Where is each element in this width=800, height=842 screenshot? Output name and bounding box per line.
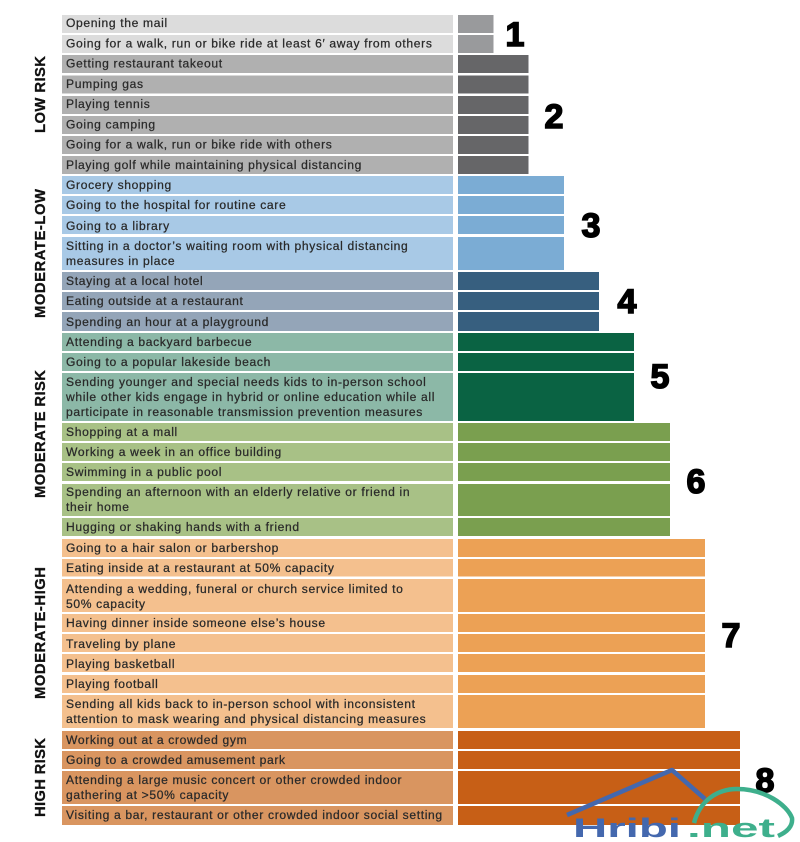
activity labels, level 3: Sitting in a doctor’s waiting room with physical distancing [66, 239, 408, 253]
level 5 band [62, 333, 669, 421]
activity labels, level 7 [66, 541, 426, 726]
number 2: 2 [545, 98, 563, 136]
activity labels, level 1 [66, 16, 433, 50]
number 8: 8 [756, 762, 774, 800]
number 6: 6 [687, 463, 705, 501]
activity labels, level 7: 50% capacity [66, 597, 146, 611]
activity rows, level 1 [62, 15, 453, 53]
activity labels, level 7: Going to a hair salon or barbershop [66, 541, 279, 555]
level 8 band [62, 731, 774, 825]
label: moderate risk: MODERATE RISK [33, 370, 49, 498]
activity rows, level 5 [62, 333, 453, 421]
logo roof line [567, 770, 705, 815]
logo green arc [694, 789, 792, 836]
activity labels, level 7: Traveling by plane [66, 637, 176, 651]
activity labels, level 2: Getting restaurant takeout [66, 56, 223, 70]
activity labels, level 8: Going to a crowded amusement park [66, 753, 286, 767]
activity labels, level 5 [65, 335, 435, 419]
number 1: 1 [506, 16, 524, 54]
level 7 band [62, 539, 740, 728]
activity rows, level 4 [62, 272, 453, 331]
watermark logo [567, 770, 792, 842]
activity labels, level 2 [66, 56, 362, 172]
activity labels, level 4: Spending an hour at a playground [66, 315, 269, 329]
activity labels, level 8: Working out at a crowded gym [66, 733, 247, 747]
number 4: 4 [618, 283, 637, 321]
activity labels, level 2: Playing tennis [66, 97, 150, 111]
number 3: 3 [582, 207, 600, 245]
number 5: 5 [651, 358, 669, 396]
level 6 band [62, 423, 705, 536]
score bars, level 6 [458, 423, 670, 536]
score bars, level 1 [458, 15, 494, 53]
activity labels, level 3: Grocery shopping [66, 178, 172, 192]
activity labels, level 3 [66, 178, 408, 268]
activity rows, level 8 [62, 731, 453, 825]
activity rows, level 6 [62, 423, 453, 536]
label: moderate-high: MODERATE-HIGH [33, 567, 49, 699]
level 2 band [62, 55, 563, 174]
activity labels, level 6 [66, 425, 410, 534]
label: low risk: LOW RISK [33, 56, 49, 133]
score bars, level 8 [458, 731, 740, 825]
activity labels, level 5: Sending younger and special needs kids to in-person school [66, 375, 426, 389]
activity labels, level 2: Going for a walk, run or bike ride with others [66, 138, 333, 152]
level 4 band [62, 272, 637, 331]
activity labels, level 6: Working a week in an office building [66, 445, 282, 459]
activity labels, level 1: Opening the mail [66, 16, 168, 30]
activity labels, level 6: Shopping at a mall [66, 425, 178, 439]
activity labels, level 7: Eating inside at a restaurant at 50% capacity [66, 561, 335, 575]
activity labels, level 5: while other kids engage in hybrid or online education while all [65, 390, 435, 404]
activity labels, level 8: Attending a large music concert or other crowded indoor [66, 773, 402, 787]
activity labels, level 2: Pumping gas [66, 77, 144, 91]
activity labels, level 8: gathering at >50% capacity [66, 788, 229, 802]
activity labels, level 6: Swimming in a public pool [66, 465, 222, 479]
activity labels, level 8 [66, 733, 443, 822]
activity labels, level 5: Going to a popular lakeside beach [66, 355, 271, 369]
activity labels, level 6: their home [66, 500, 130, 514]
activity labels, level 5: Attending a backyard barbecue [66, 335, 252, 349]
activity labels, level 7: Having dinner inside someone else’s house [66, 616, 326, 630]
activity labels, level 3: Going to a library [66, 219, 170, 233]
risk category labels [33, 56, 49, 817]
activity labels, level 1: Going for a walk, run or bike ride at least 6′ away from others [66, 36, 433, 50]
score bars, level 2 [458, 55, 528, 174]
activity labels, level 5: participate in reasonable transmission prevention measures [66, 405, 423, 419]
number 7: 7 [722, 617, 740, 655]
activity labels, level 7: Sending all kids back to in-person school with inconsistent [66, 697, 416, 711]
activity labels, level 2: Going camping [66, 118, 156, 132]
activity labels, level 4: Staying at a local hotel [66, 274, 203, 288]
label: moderate-low: MODERATE-LOW [33, 189, 49, 318]
activity rows, level 2 [62, 55, 453, 174]
activity labels, level 8: Visiting a bar, restaurant or other crowded indoor social setting [66, 808, 443, 822]
activity labels, level 7: Attending a wedding, funeral or church service limited to [66, 582, 404, 596]
label: high risk: HIGH RISK [33, 738, 49, 817]
level 3 band [62, 176, 600, 270]
score bars, level 3 [458, 176, 564, 270]
score bars, level 7 [458, 539, 705, 728]
activity labels, level 3: Going to the hospital for routine care [66, 198, 286, 212]
activity labels, level 2: Playing golf while maintaining physical distancing [66, 158, 362, 172]
activity labels, level 6: Spending an afternoon with an elderly relative or friend in [66, 485, 410, 499]
activity labels, level 7: attention to mask wearing and physical distancing measures [66, 712, 426, 726]
activity rows, level 3 [62, 176, 453, 270]
activity labels, level 7: Playing basketball [66, 657, 175, 671]
activity labels, level 7: Playing football [66, 677, 158, 691]
activity labels, level 4 [66, 274, 269, 329]
score bars, level 5 [458, 333, 634, 421]
activity labels, level 3: measures in place [66, 254, 175, 268]
activity labels, level 6: Hugging or shaking hands with a friend [66, 520, 300, 534]
score bars, level 4 [458, 272, 599, 331]
activity labels, level 4: Eating outside at a restaurant [66, 294, 244, 308]
activity rows, level 7 [62, 539, 453, 728]
level 1 band [62, 15, 524, 54]
